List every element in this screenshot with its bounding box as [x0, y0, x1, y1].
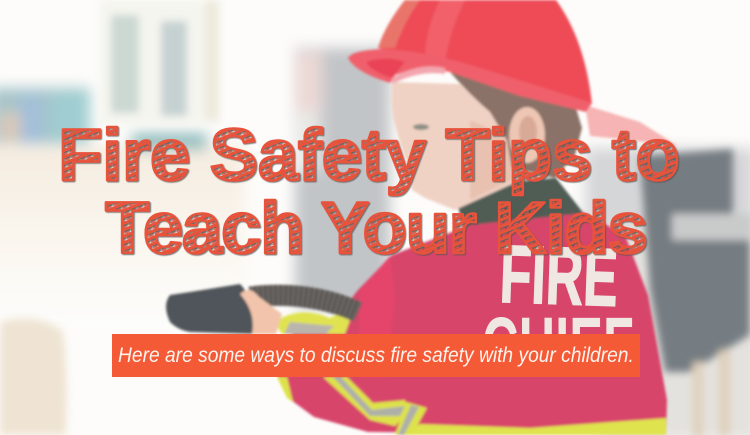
- nozzle: [166, 284, 258, 334]
- yellow hem: [400, 418, 666, 435]
- back wall lower right: [585, 148, 750, 238]
- chair right: [640, 149, 750, 372]
- FIRE lettering on jacket: FIRE: [498, 229, 620, 324]
- counter: [0, 146, 245, 336]
- collar: [455, 178, 585, 240]
- title: Teach Your Kids: [105, 188, 648, 269]
- helmet brim: [348, 49, 592, 112]
- title: Fire Safety Tips to: [58, 115, 680, 196]
- CHIEF lettering clipped by banner: CHIEF: [482, 301, 634, 392]
- reflective stripes lower sleeve: [323, 377, 408, 426]
- boy in helmet and jacket: [166, 0, 678, 435]
- helmet translucent brim right: [585, 105, 678, 146]
- teal counter items: [132, 133, 207, 150]
- eye: [413, 124, 429, 130]
- beige chair: [0, 318, 66, 435]
- hair: [450, 72, 582, 178]
- neck and face: [392, 82, 575, 210]
- ear: [509, 107, 545, 163]
- cuff: [274, 306, 355, 334]
- jacket body: [275, 213, 667, 435]
- shelf: [0, 88, 90, 144]
- subtitle banner: [112, 334, 640, 377]
- cabinet frame: [100, 0, 220, 125]
- hose: [250, 295, 358, 312]
- hand: [240, 290, 282, 334]
- fridge: [295, 48, 390, 308]
- subtitle banner: Here are some ways to discuss fire safety with your children.: [118, 344, 634, 367]
- helmet dome: [378, 0, 592, 104]
